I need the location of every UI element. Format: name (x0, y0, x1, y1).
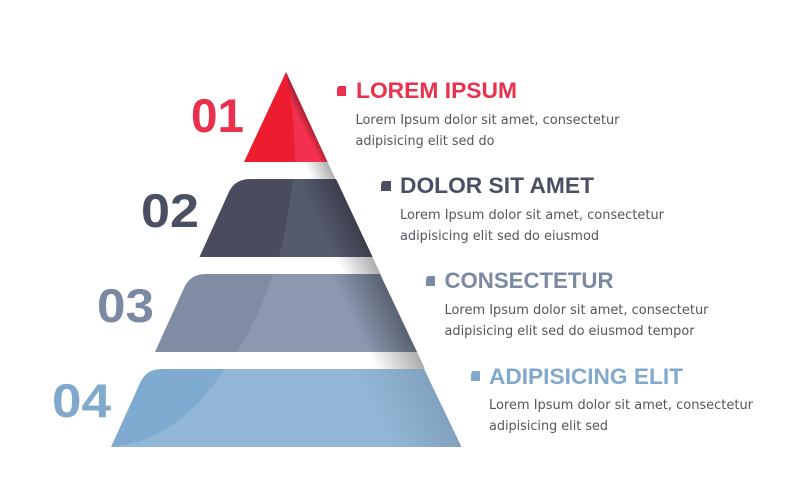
bullet 4 (471, 371, 480, 381)
number 01: 01 (191, 89, 244, 142)
tier 1 red (244, 72, 328, 162)
body 3: adipisicing elit sed do eiusmod tempor (444, 324, 695, 339)
number 02: 02 (141, 184, 199, 237)
body 1: adipisicing elit sed do (356, 134, 495, 149)
tier 2 charcoal (200, 179, 372, 257)
body 4: adipisicing elit sed (489, 419, 608, 434)
body 3: Lorem Ipsum dolor sit amet, consectetur (444, 303, 709, 318)
body 1: Lorem Ipsum dolor sit amet, consectetur (356, 113, 620, 128)
item 3 text (426, 268, 709, 339)
heading 1: LOREM IPSUM (356, 78, 517, 103)
tier 3 slate (155, 274, 417, 352)
body 2: adipisicing elit sed do eiusmod (400, 229, 599, 244)
bullet 1 (337, 86, 346, 96)
gap shadows (300, 162, 425, 369)
body 4: Lorem Ipsum dolor sit amet, consectetur (489, 398, 754, 413)
bullet 3 (426, 276, 435, 286)
number 03: 03 (97, 279, 154, 332)
bullet 2 (381, 181, 391, 191)
item 2 text (381, 173, 665, 244)
body 2: Lorem Ipsum dolor sit amet, consectetur (400, 208, 665, 223)
number 04: 04 (52, 374, 111, 427)
heading 2: DOLOR SIT AMET (400, 173, 595, 198)
heading 3: CONSECTETUR (444, 268, 614, 293)
item 1 text (337, 78, 620, 149)
item 4 text (471, 364, 754, 434)
heading 4: ADIPISICING ELIT (489, 364, 684, 389)
tier 4 blue (111, 369, 462, 447)
